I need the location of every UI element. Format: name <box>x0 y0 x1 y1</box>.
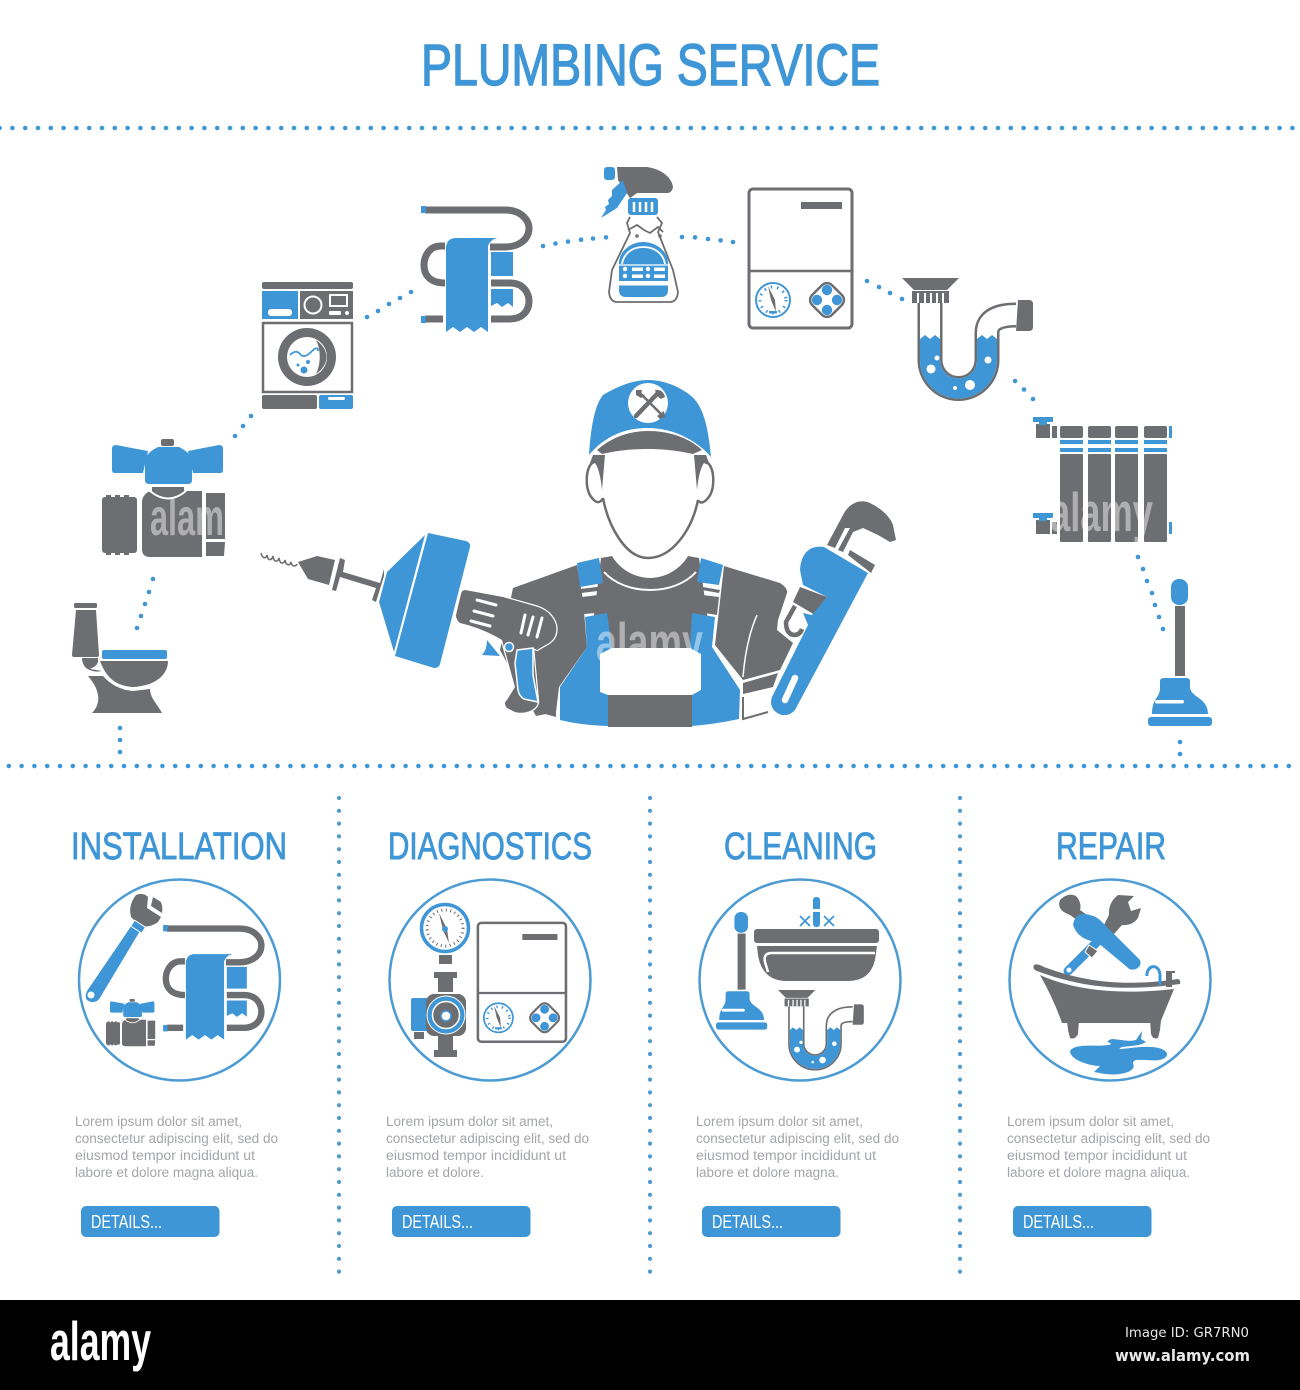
bib pocket <box>600 653 701 691</box>
text: cleaning: eiusmod tempor incididunt ut <box>696 1148 876 1163</box>
footer bar <box>0 1300 1300 1390</box>
plumber figure <box>261 380 896 727</box>
panel: diagnostics <box>386 826 592 1237</box>
text: repair: Lorem ipsum dolor sit amet, <box>1007 1114 1174 1129</box>
text: installation: consectetur adipiscing elit, sed do <box>75 1131 278 1146</box>
icon: ball valve <box>102 439 225 557</box>
icon: towel rail <box>421 206 529 332</box>
overall straps <box>560 558 740 726</box>
watermark on radiator: alamy <box>1050 481 1153 543</box>
title: PLUMBING SERVICE <box>421 33 880 98</box>
icon circle: repair <box>1010 880 1210 1080</box>
text: repair: labore et dolore magna aliqua. <box>1007 1165 1190 1180</box>
button: details: DETAILS... <box>91 1212 162 1232</box>
text: diagnostics <box>386 1114 589 1180</box>
text: diagnostics: labore et dolore. <box>386 1165 484 1180</box>
text: diagnostics: eiusmod tempor incididunt ut <box>386 1148 566 1163</box>
heading: cleaning: CLEANING <box>724 826 877 868</box>
button: details <box>392 1206 530 1237</box>
text: cleaning: consectetur adipiscing elit, sed do <box>696 1131 899 1146</box>
text: installation <box>75 1114 278 1180</box>
button: details: DETAILS... <box>712 1212 783 1232</box>
heading: repair: REPAIR <box>1056 826 1166 868</box>
heading: installation: INSTALLATION <box>71 826 287 868</box>
panel: installation <box>71 826 287 1237</box>
cap badge tools <box>636 390 665 419</box>
text: repair: eiusmod tempor incididunt ut <box>1007 1148 1187 1163</box>
button: details <box>1013 1206 1152 1237</box>
icon: siphon trap <box>902 278 1033 390</box>
right arm and shoulder <box>715 566 793 680</box>
watermark on bib: alamy <box>596 611 703 673</box>
icon: washing machine <box>262 282 353 409</box>
button: details <box>702 1206 840 1237</box>
icon: pipe wrench <box>771 501 896 715</box>
image id: Image ID: GR7RN0 <box>1125 1325 1249 1341</box>
button: details <box>81 1206 220 1237</box>
button: details: DETAILS... <box>1023 1212 1094 1232</box>
left arm and shoulder <box>500 565 587 716</box>
text: installation: eiusmod tempor incididunt ut <box>75 1148 255 1163</box>
icon circle: cleaning <box>700 880 900 1080</box>
watermark on valve: alam <box>150 489 224 547</box>
button: details: DETAILS... <box>402 1212 473 1232</box>
head <box>603 498 698 558</box>
shirt <box>590 556 712 648</box>
text: repair <box>1007 1114 1210 1180</box>
website: www.alamy.com <box>1115 1346 1250 1365</box>
heading: diagnostics: DIAGNOSTICS <box>388 826 592 868</box>
icon: toilet <box>72 603 168 713</box>
footer logo: alamy <box>50 1310 151 1372</box>
icon circle: installation <box>79 880 280 1080</box>
text: cleaning: Lorem ipsum dolor sit amet, <box>696 1114 863 1129</box>
text: installation: labore et dolore magna aliqua. <box>75 1165 258 1180</box>
icon: plunger <box>1148 579 1212 726</box>
panel: repair <box>1007 826 1210 1237</box>
text: diagnostics: consectetur adipiscing elit, sed do <box>386 1131 589 1146</box>
panel: cleaning <box>696 826 900 1237</box>
text: installation: Lorem ipsum dolor sit amet, <box>75 1114 242 1129</box>
icon: drain cleaner drill <box>261 533 557 717</box>
icon: water heater boiler <box>749 189 852 328</box>
text: cleaning <box>696 1114 899 1180</box>
text: cleaning: labore et dolore magna. <box>696 1165 839 1180</box>
icon: spray bottle <box>601 167 678 302</box>
cap <box>589 380 711 457</box>
text: repair: consectetur adipiscing elit, sed do <box>1007 1131 1210 1146</box>
text: diagnostics: Lorem ipsum dolor sit amet, <box>386 1114 553 1129</box>
icon circle: diagnostics <box>390 880 590 1080</box>
icon: radiator <box>1033 417 1172 543</box>
